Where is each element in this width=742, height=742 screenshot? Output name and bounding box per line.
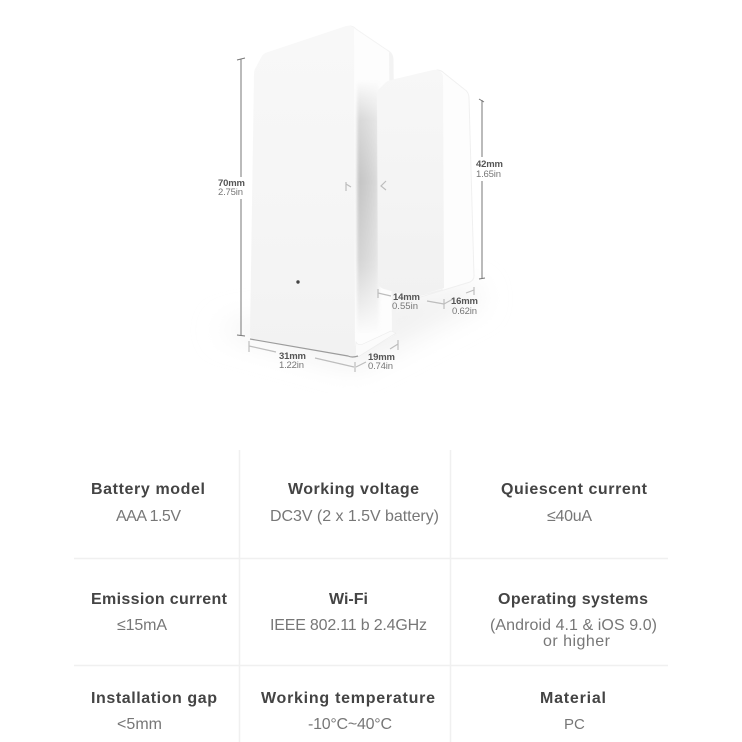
- spec: operating systems: or higher: [543, 633, 611, 650]
- dimension: depth 19mm: 0.74in: [368, 361, 393, 372]
- spec: battery model: Battery model: [91, 481, 205, 498]
- dimension: height 42mm: 1.65in: [476, 169, 501, 180]
- dimension: width 14mm: [378, 289, 444, 312]
- dimension: depth 16mm: [444, 287, 478, 317]
- spec: emission current: Emission current: [91, 591, 228, 608]
- large sensor base edge: [250, 339, 358, 357]
- spec: installation gap: <5mm: [117, 716, 162, 733]
- spec: material: [540, 690, 606, 733]
- large sensor body: [250, 26, 396, 357]
- large sensor side rim: [389, 52, 396, 334]
- magnet front face: [377, 70, 444, 296]
- spec: operating systems: [490, 591, 657, 650]
- dimension: depth 19mm: 19mm: [368, 352, 395, 363]
- dimension: height 70mm: 70mm: [218, 178, 245, 189]
- dimension: depth 19mm: [356, 340, 398, 372]
- dimension: width 31mm: [249, 341, 355, 372]
- dimension: width 31mm: 31mm: [279, 351, 306, 362]
- spec: wi-fi: [270, 591, 427, 634]
- floor shadow: [215, 285, 485, 368]
- spec: wi-fi: IEEE 802.11 b 2.4GHz: [270, 617, 427, 634]
- spec: working temperature: -10°C~40°C: [308, 716, 392, 733]
- spec: quiescent current: [501, 481, 648, 525]
- spec: installation gap: [91, 690, 217, 733]
- spec: working voltage: Working voltage: [288, 481, 419, 498]
- spec: emission current: [91, 591, 228, 634]
- status indicator dot: [296, 280, 300, 284]
- large sensor front face: [250, 26, 355, 357]
- magnet side face: [414, 70, 474, 297]
- large sensor lower side lip: [355, 331, 396, 357]
- spec: quiescent current: Quiescent current: [501, 481, 648, 498]
- spec: material: Material: [540, 690, 606, 707]
- spec: quiescent current: ≤40uA: [547, 508, 592, 525]
- dimension: width 14mm: 14mm: [393, 292, 420, 303]
- spec: battery model: AAA 1.5V: [116, 508, 181, 525]
- spec: battery model: [91, 481, 205, 525]
- large sensor alignment mark: [346, 182, 351, 191]
- spec: working temperature: [261, 690, 435, 733]
- spec: installation gap: Installation gap: [91, 690, 217, 707]
- spec: wi-fi: Wi-Fi: [329, 591, 368, 608]
- magnet alignment mark: [381, 181, 386, 190]
- spec: working voltage: DC3V (2 x 1.5V battery): [270, 508, 439, 525]
- spec: operating systems: (Android 4.1 & iOS 9.0): [490, 617, 657, 634]
- dimension: height 42mm: 42mm: [476, 159, 503, 170]
- dimension: height 70mm: 2.75in: [218, 187, 243, 198]
- spec: operating systems: Operating systems: [498, 591, 648, 608]
- dimension: depth 16mm: 0.62in: [452, 306, 477, 317]
- dimension: width 14mm: 0.55in: [392, 301, 418, 312]
- dimension: height 70mm: [218, 58, 245, 336]
- spec: material: PC: [564, 716, 585, 733]
- dimension: depth 16mm: 16mm: [451, 296, 478, 307]
- dimension: height 42mm: [476, 99, 503, 279]
- table grid lines: [74, 450, 668, 742]
- large sensor side face: [350, 26, 396, 357]
- small magnet body: [377, 70, 474, 297]
- spec: working temperature: Working temperature: [261, 690, 435, 707]
- shadow cast by magnet: [357, 80, 379, 335]
- spec: working voltage: [270, 481, 439, 525]
- spec: emission current: ≤15mA: [117, 617, 167, 634]
- dimension: width 31mm: 1.22in: [279, 360, 304, 371]
